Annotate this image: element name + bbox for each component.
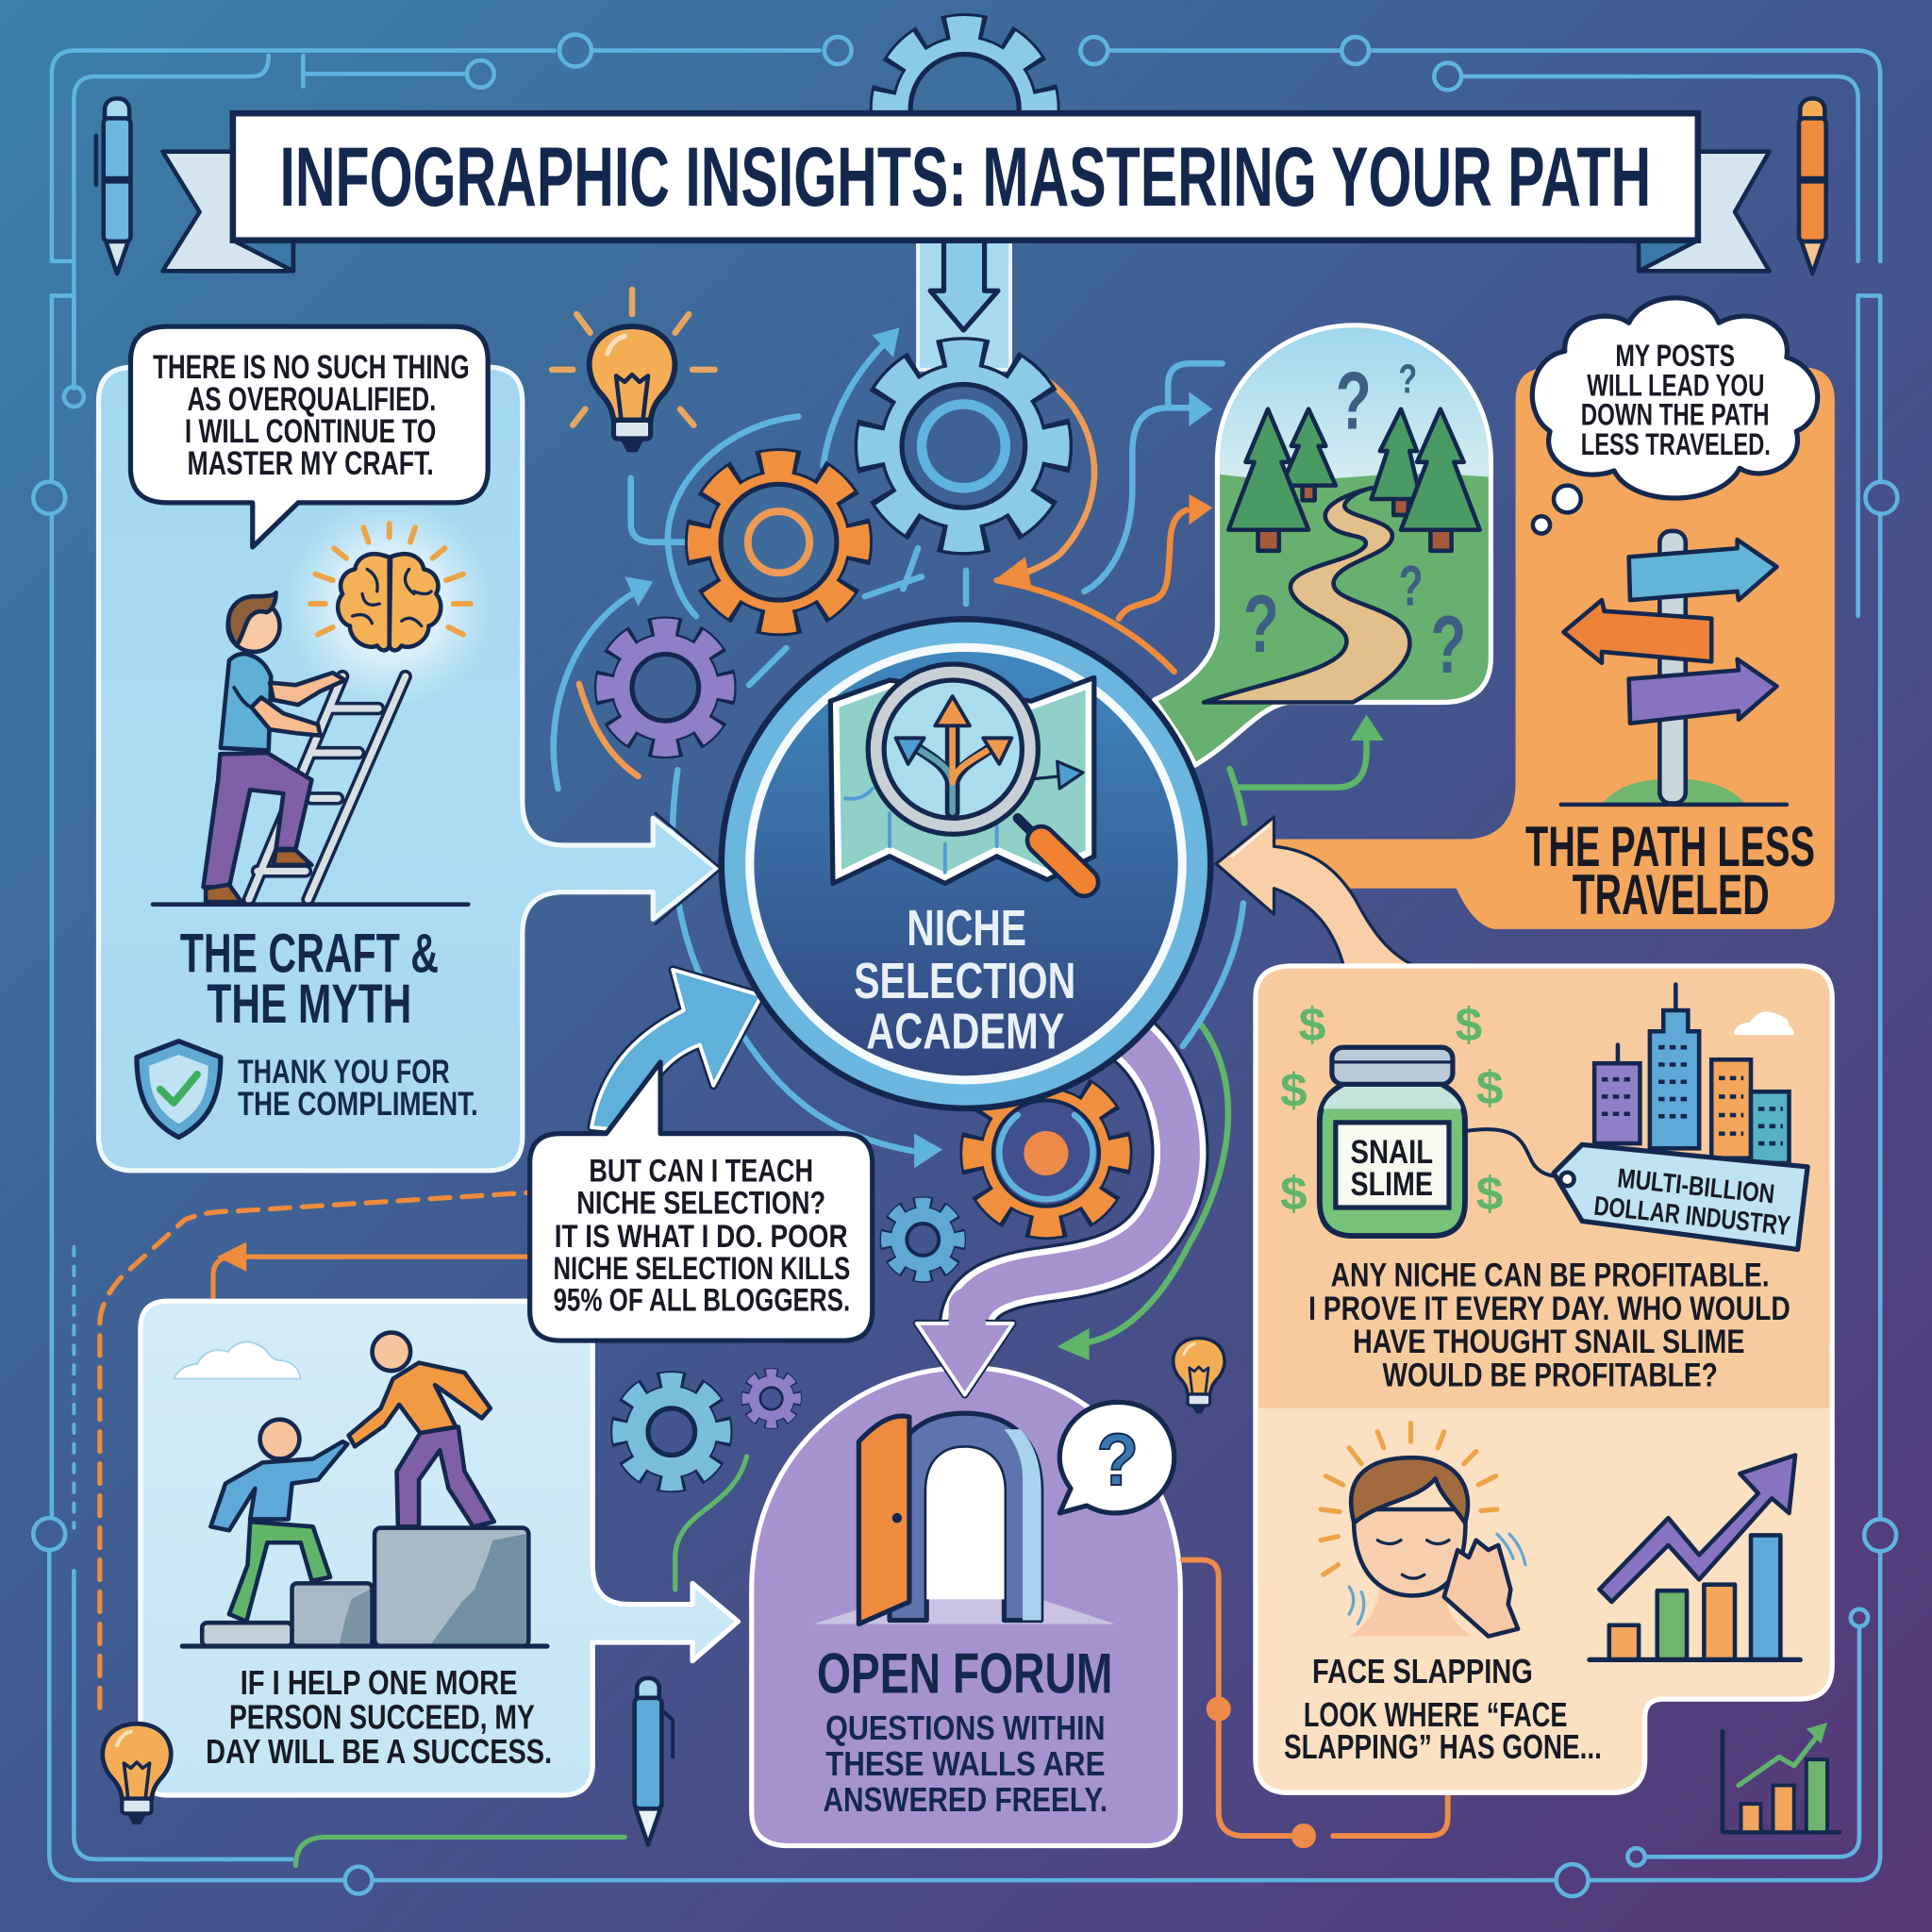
- icon: dollar signs: $: [1476, 1168, 1503, 1221]
- heading: [1525, 815, 1815, 926]
- icon: jar: [1320, 1047, 1465, 1236]
- small gears: [621, 1204, 958, 1483]
- body: THESE WALLS ARE: [825, 1744, 1106, 1783]
- pen top right: [1799, 98, 1826, 274]
- question marks: ?: [1398, 358, 1417, 403]
- vertical connector with down arrow: [918, 234, 1010, 370]
- speech box: can I teach: NICHE SELECTION?: [576, 1186, 825, 1222]
- flow arrows around gears: [554, 327, 1384, 1360]
- cloud text: DOWN THE PATH: [1581, 397, 1770, 432]
- gear: top light blue: [885, 29, 1044, 188]
- icon: map with magnifier: [830, 664, 1094, 883]
- body: QUESTIONS WITHIN: [825, 1708, 1106, 1747]
- gears cluster: [606, 355, 1055, 747]
- hub title: NICHE: [907, 901, 1026, 957]
- question bubble: [1059, 1402, 1174, 1513]
- gear: large blue: [873, 355, 1055, 537]
- thought cloud: [1532, 298, 1818, 534]
- speech bubble: THERE IS NO SUCH THING: [153, 349, 470, 386]
- profit text: I PROVE IT EVERY DAY. WHO WOULD: [1308, 1291, 1790, 1327]
- cloud: [174, 1341, 301, 1379]
- magnifier: [868, 664, 1084, 882]
- caption: [206, 1663, 552, 1771]
- arrow tip outline: [656, 813, 721, 924]
- icon: city: [1594, 985, 1789, 1163]
- face slapping text: FACE SLAPPING: [1312, 1652, 1533, 1690]
- panel: help one more person: [141, 1301, 738, 1795]
- question marks: [1243, 357, 1466, 691]
- question marks: ?: [1336, 357, 1372, 447]
- icon: shield: [137, 1041, 221, 1138]
- question marks: ?: [1398, 554, 1424, 617]
- cloud text: WILL LEAD YOU: [1587, 367, 1764, 402]
- icon: small chart bottom right: [1723, 1723, 1840, 1832]
- icon: dollar signs: $: [1280, 1168, 1307, 1221]
- person: helper: [349, 1333, 494, 1526]
- blocks: [202, 1528, 528, 1646]
- caption: PERSON SUCCEED, MY: [229, 1697, 535, 1736]
- hub title: ACADEMY: [866, 1005, 1064, 1060]
- ground line: [153, 903, 468, 906]
- icon: bottom left bulb: [103, 1724, 171, 1824]
- green connector lines: [295, 1457, 747, 1865]
- body: [823, 1708, 1108, 1819]
- speech box: can I teach: 95% OF ALL BLOGGERS.: [553, 1283, 850, 1319]
- gear: tiny purple: [746, 1373, 797, 1424]
- hub circle: [718, 616, 1214, 1111]
- icon: jar: SNAIL: [1351, 1134, 1433, 1171]
- icon: top light bulb: [552, 290, 715, 452]
- heading: [180, 924, 439, 1035]
- question marks: ?: [1243, 579, 1279, 670]
- heading: TRAVELED: [1573, 863, 1770, 926]
- heading: OPEN FORUM: [817, 1642, 1112, 1706]
- icon: dollar signs: $: [1476, 1061, 1503, 1114]
- panel: craft and myth: [98, 326, 721, 1171]
- speech box: can I teach: NICHE SELECTION KILLS: [553, 1251, 850, 1287]
- trees: [1228, 409, 1480, 551]
- note text: THE COMPLIMENT.: [238, 1086, 478, 1123]
- orange connector: [1183, 1560, 1448, 1848]
- profit text: HAVE THOUGHT SNAIL SLIME: [1353, 1324, 1744, 1360]
- cloud text: LESS TRAVELED.: [1581, 426, 1771, 461]
- wire to tag: [1465, 1129, 1562, 1176]
- caption: DAY WILL BE A SUCCESS.: [206, 1732, 552, 1771]
- speech bubble: AS OVERQUALIFIED.: [188, 381, 436, 418]
- gear: orange: [700, 464, 858, 621]
- speech bubble: MASTER MY CRAFT.: [188, 445, 434, 482]
- icon: jar: SLIME: [1351, 1166, 1433, 1203]
- icon: dollar signs: $: [1456, 999, 1482, 1052]
- purple ribbon arrow: [917, 1041, 1180, 1395]
- icon: brain: [310, 524, 471, 650]
- icon: face slap: [1321, 1424, 1525, 1637]
- body: ANSWERED FREELY.: [823, 1780, 1108, 1819]
- speech box: can I teach: IT IS WHAT I DO. POOR: [555, 1219, 848, 1255]
- dashed orange connectors: [74, 1192, 527, 1707]
- base line: [182, 1644, 547, 1648]
- left ribbon: [162, 152, 293, 271]
- person climbing: [204, 592, 345, 902]
- speech box: can I teach: BUT CAN I TEACH: [589, 1154, 813, 1190]
- sky: [1220, 327, 1489, 479]
- question marks: ?: [1430, 600, 1466, 691]
- road: [1204, 488, 1409, 702]
- caption: IF I HELP ONE MORE: [241, 1663, 518, 1702]
- face slapping text: LOOK WHERE “FACE: [1304, 1695, 1567, 1734]
- question bubble: ?: [1096, 1418, 1139, 1501]
- panel: snail slime and face slapping: [1256, 966, 1832, 1792]
- price tag: [1554, 1144, 1807, 1249]
- hub title: SELECTION: [854, 954, 1075, 1009]
- signpost: [1561, 531, 1787, 805]
- icon: dollar signs: $: [1280, 1064, 1307, 1117]
- door and arch: [813, 1413, 1115, 1624]
- heading: THE CRAFT &: [180, 924, 439, 985]
- pen top left: [96, 98, 130, 274]
- icon: growth chart: [1590, 1456, 1800, 1659]
- panel: path less traveled: [1272, 367, 1835, 929]
- hub title: [854, 901, 1075, 1060]
- icon: dollar signs: [1280, 999, 1503, 1221]
- cloud text: [1581, 338, 1771, 461]
- price tag: MULTI-BILLION: [1616, 1163, 1776, 1210]
- face slapping text: [1284, 1652, 1602, 1766]
- note text: THANK YOU FOR: [238, 1054, 450, 1091]
- curved blue arrow: [591, 970, 761, 1131]
- price tag: DOLLAR INDUSTRY: [1592, 1191, 1791, 1241]
- ladder: [249, 676, 406, 899]
- gear: lower orange: [974, 1081, 1118, 1225]
- gear: small blue: [887, 1204, 958, 1275]
- icon: dollar signs: $: [1299, 999, 1325, 1052]
- heading: THE MYTH: [207, 974, 411, 1035]
- top section: [1258, 969, 1830, 1408]
- icon: cloud: [1734, 1011, 1794, 1035]
- title banner: [162, 113, 1770, 271]
- profit text: [1308, 1257, 1790, 1393]
- speech bubble: [130, 326, 488, 547]
- gear: purple: [606, 628, 724, 747]
- panel: forest path: [1155, 325, 1491, 765]
- icon: lower pen: [635, 1678, 673, 1844]
- icon: small bulb: [1174, 1338, 1224, 1413]
- arrow: peach into hub: [1216, 817, 1421, 969]
- face slapping text: SLAPPING” HAS GONE...: [1284, 1727, 1602, 1766]
- gear: blue: [621, 1381, 723, 1483]
- note text: [238, 1054, 478, 1123]
- speech bubble: I WILL CONTINUE TO: [185, 413, 436, 450]
- speech box: can I teach: [530, 1062, 873, 1341]
- person: climber: [210, 1420, 347, 1622]
- cloud text: MY POSTS: [1615, 338, 1735, 373]
- profit text: WOULD BE PROFITABLE?: [1382, 1357, 1718, 1393]
- profit text: ANY NICHE CAN BE PROFITABLE.: [1331, 1257, 1770, 1294]
- panel: open forum: [752, 1368, 1180, 1846]
- glow behind brain: [285, 499, 494, 708]
- right ribbon: [1639, 152, 1770, 271]
